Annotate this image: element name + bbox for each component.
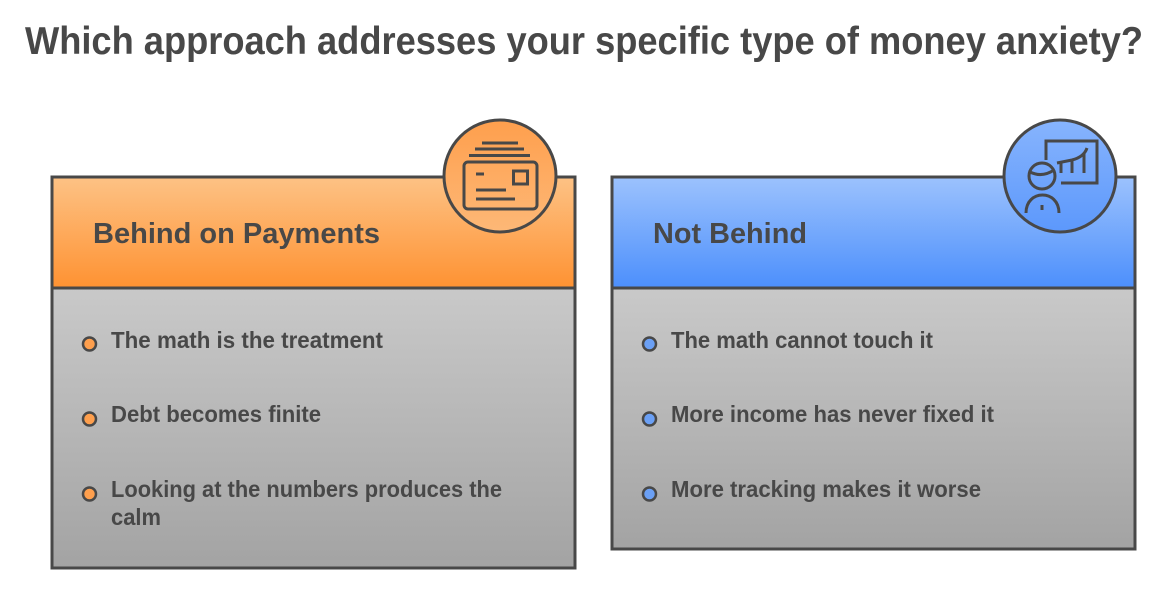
bullet item 3: More tracking makes it worse — [671, 476, 981, 502]
panel header: orange — [52, 177, 575, 288]
heading: behind on payments: Behind on Payments — [93, 218, 380, 250]
bullet item 2: Debt becomes finite — [111, 401, 321, 427]
heading: not behind: Not Behind — [653, 218, 807, 250]
icon: credit card — [444, 120, 556, 232]
icon: person with chart — [1004, 120, 1116, 232]
bullet item 2: More income has never fixed it — [671, 401, 994, 427]
bullet item 3: Looking at the numbers produces the — [111, 476, 502, 502]
bullet item 1: The math is the treatment — [111, 327, 383, 353]
panel header: blue — [612, 177, 1135, 288]
panel: not behind — [612, 120, 1135, 549]
bullet item 1: The math cannot touch it — [671, 327, 933, 353]
panel body: blue list — [612, 288, 1135, 549]
bullet item 3 — [83, 476, 502, 530]
panel body: orange list — [52, 288, 575, 568]
panel: behind on payments — [52, 120, 575, 568]
bullet item 3: calm — [111, 504, 161, 530]
